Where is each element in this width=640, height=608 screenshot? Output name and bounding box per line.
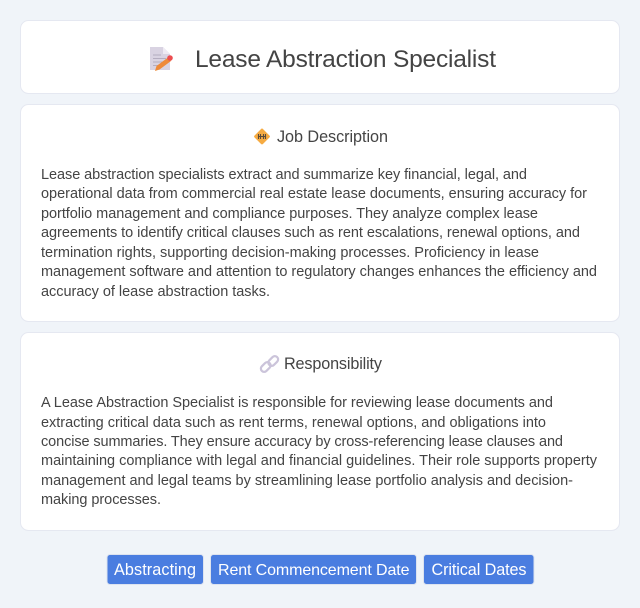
icon: document with pencil xyxy=(150,47,173,71)
tag: Abstracting xyxy=(107,554,204,584)
tag: Critical Dates: Critical Dates xyxy=(432,561,526,579)
tag: Abstracting: Abstracting xyxy=(114,561,196,579)
text block: job description: operational data from commercial real estate lease documents, ensuring accuracy for xyxy=(41,186,587,202)
heading: job description: Job Description xyxy=(277,128,388,146)
tag: Rent Commencement Date: Rent Commencement Date xyxy=(218,562,410,579)
title: Lease Abstraction Specialist xyxy=(195,46,496,73)
text block: job description: agreements to identify critical clauses such as rent escalations, renewal options, and xyxy=(41,225,580,241)
text block: job description: termination rights, supporting decision-making processes. Proficiency in lease xyxy=(41,245,539,261)
text block: job description xyxy=(41,167,597,300)
icon: chain link xyxy=(260,355,279,373)
tag: Critical Dates xyxy=(424,554,534,584)
text block: responsibility: concise summaries. They ensure accuracy by cross-referencing lease clauses and xyxy=(41,434,563,450)
text block: job description: portfolio management and compliance purposes. They analyze complex lease xyxy=(41,206,538,222)
text block: job description: management software and attention to regulatory changes enhances the efficiency and xyxy=(41,264,597,280)
text block: responsibility: A Lease Abstraction Specialist is responsible for reviewing lease documents and xyxy=(41,395,553,411)
panel: responsibility xyxy=(20,332,620,530)
text block: job description: Lease abstraction specialists extract and summarize key financial, legal, and xyxy=(41,167,527,183)
heading: responsibility: Responsibility xyxy=(284,355,383,373)
text block: responsibility xyxy=(41,395,598,508)
tag: Rent Commencement Date xyxy=(210,554,416,584)
text block: responsibility: maintaining compliance with legal and financial guidelines. Their role supports property xyxy=(41,453,598,469)
text block: responsibility: management and legal teams by streamlining lease portfolio analysis and decision- xyxy=(41,473,573,489)
text block: job description: accuracy of lease abstraction tasks. xyxy=(41,284,270,300)
panel: title card xyxy=(20,20,620,94)
panel: job description xyxy=(20,104,620,322)
text block: responsibility: extracting critical data such as rent terms, renewal options, and obligations into xyxy=(41,415,546,431)
icon: diamond road sign xyxy=(254,128,270,145)
text block: responsibility: making processes. xyxy=(41,492,161,508)
